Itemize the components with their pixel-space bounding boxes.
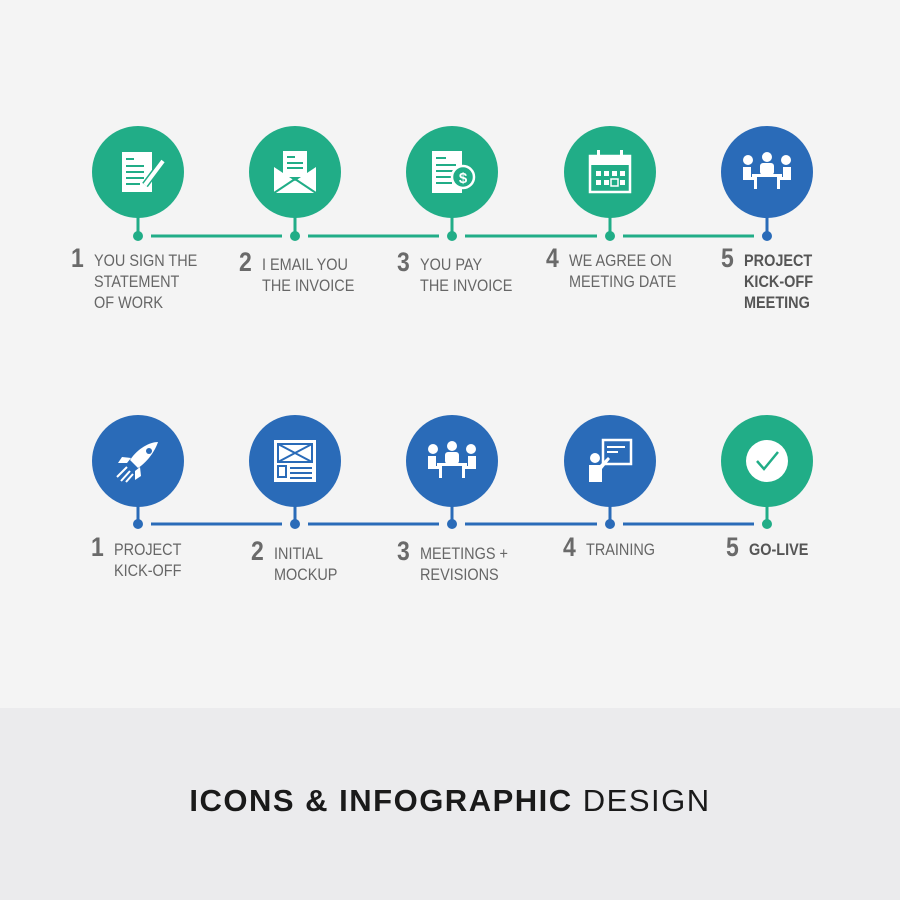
label: step 2 bottom — [251, 536, 337, 584]
label: step 5 bottom — [726, 532, 808, 562]
text: 4 — [546, 243, 559, 273]
text: 2 — [251, 536, 264, 566]
label: step 1 top: STATEMENT — [94, 272, 179, 291]
title: ICONS & INFOGRAPHIC DESIGN — [189, 783, 711, 818]
icon: training — [564, 415, 656, 507]
top row connectors — [133, 210, 754, 241]
text: 3 — [397, 247, 410, 277]
label: step 4 top: WE AGREE ON — [569, 251, 672, 270]
icon: check go-live — [721, 415, 813, 507]
text: 5 — [721, 243, 734, 273]
label: step 3 bottom: REVISIONS — [420, 565, 499, 584]
label: step 5 top: PROJECT — [744, 251, 812, 270]
label: step 3 bottom: MEETINGS + — [420, 544, 508, 563]
label: step 1 bottom — [91, 532, 182, 580]
text: 1 — [91, 532, 104, 562]
text: 2 — [239, 247, 252, 277]
label: step 2 top: THE INVOICE — [262, 276, 354, 295]
label: step 1 top — [71, 243, 197, 312]
label: step 2 top: I EMAIL YOU — [262, 255, 348, 274]
icon: email envelope — [249, 126, 341, 218]
label: step 5 top: MEETING — [744, 293, 810, 312]
icon: meeting people (top) — [721, 126, 813, 218]
icon: rocket — [92, 415, 184, 507]
icon: sign document — [92, 126, 184, 218]
label: step 5 top — [721, 243, 813, 312]
icon: mockup — [249, 415, 341, 507]
label: step 4 bottom — [563, 532, 655, 562]
label: step 1 bottom: KICK-OFF — [114, 561, 181, 580]
text: 3 — [397, 536, 410, 566]
label: step 3 bottom — [397, 536, 508, 584]
label: step 4 bottom: TRAINING — [586, 540, 655, 559]
label: step 1 top: OF WORK — [94, 293, 163, 312]
footer band — [0, 708, 900, 900]
bottom row connectors — [133, 500, 754, 529]
icon: invoice with dollar — [406, 126, 498, 218]
text: 1 — [71, 243, 84, 273]
label: step 3 top: THE INVOICE — [420, 276, 512, 295]
text: 4 — [563, 532, 576, 562]
label: step 2 top — [239, 247, 354, 295]
label: step 4 top — [546, 243, 676, 291]
icon: meeting people (bottom) — [406, 415, 498, 507]
label: step 1 top: YOU SIGN THE — [94, 251, 197, 270]
label: step 1 bottom: PROJECT — [114, 540, 181, 559]
label: step 3 top: YOU PAY — [420, 255, 482, 274]
icon: invoice with dollar: $ — [459, 170, 468, 187]
label: step 2 bottom: MOCKUP — [274, 565, 337, 584]
label: step 5 bottom: GO-LIVE — [749, 540, 808, 559]
text: 5 — [726, 532, 739, 562]
label: step 5 top: KICK-OFF — [744, 272, 813, 291]
label: step 3 top — [397, 247, 512, 295]
label: step 2 bottom: INITIAL — [274, 544, 323, 563]
label: step 4 top: MEETING DATE — [569, 272, 676, 291]
icon: calendar — [564, 126, 656, 218]
